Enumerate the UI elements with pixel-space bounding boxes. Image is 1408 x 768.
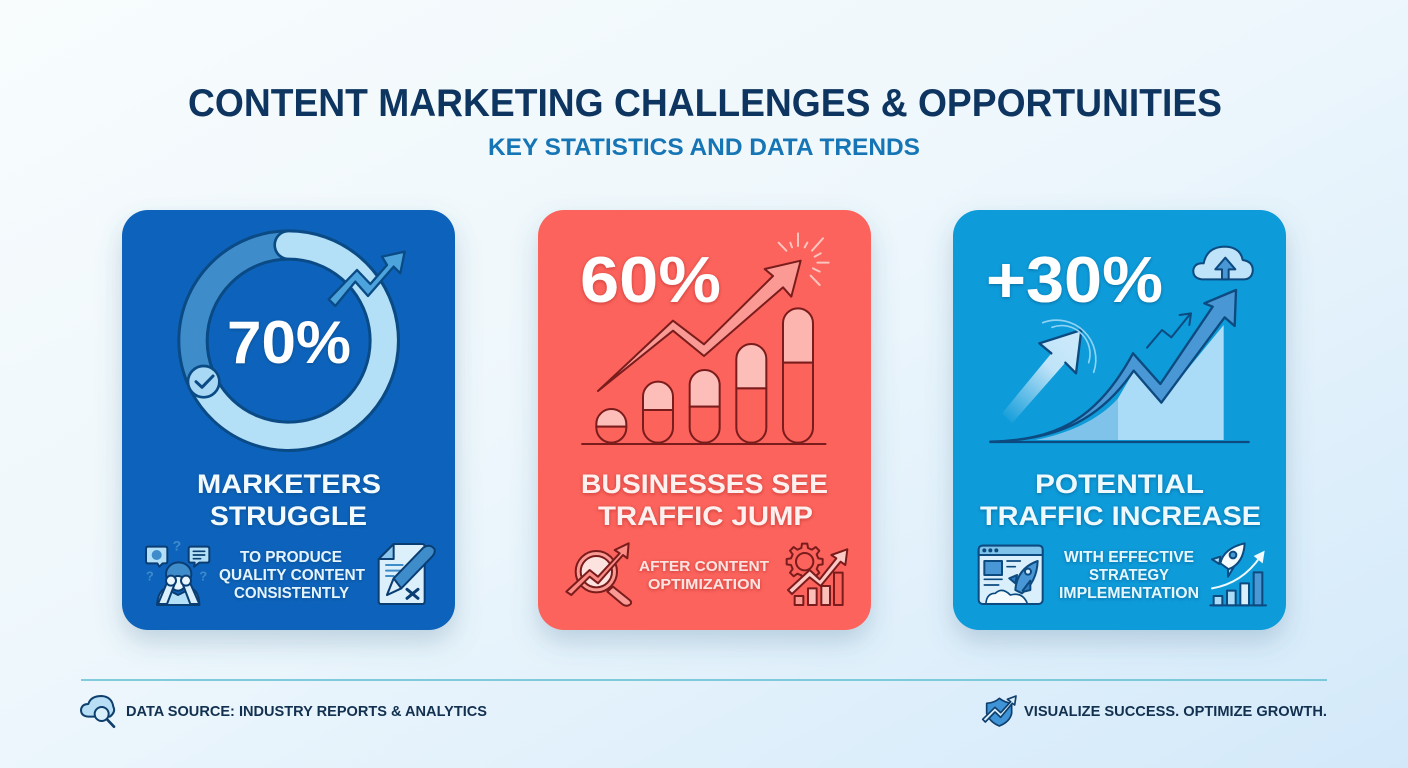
stat: 70%: 70%: [227, 309, 351, 376]
description: to produce quality content consistently: CONSISTENTLY: [234, 585, 349, 602]
heading: potential traffic increase: [980, 469, 1261, 531]
heading: marketers struggle: STRUGGLE: [210, 501, 367, 531]
bar chart with growth arrow: [581, 233, 829, 444]
description: with effective strategy implementation: [1059, 549, 1199, 602]
heading: marketers struggle: [197, 469, 381, 531]
icon: document and pen: [379, 544, 435, 604]
title: CONTENT MARKETING CHALLENGES & OPPORTUNITIES: [188, 82, 1222, 125]
description: with effective strategy implementation: WITH EFFECTIVE: [1064, 549, 1194, 566]
stat: 60%: 60%: [580, 243, 721, 316]
icon: cloud with magnifier: [81, 696, 114, 727]
description: with effective strategy implementation: STRATEGY: [1089, 567, 1169, 584]
icon: shield with arrow: [983, 696, 1016, 726]
icon: rocket and growth bars: [1210, 543, 1266, 605]
icon: browser window with rocket: [979, 546, 1043, 604]
description: to produce quality content consistently: TO PRODUCE: [240, 549, 342, 566]
subtitle: KEY STATISTICS AND DATA TRENDS: [488, 134, 920, 161]
panel: marketers struggle: [122, 210, 455, 630]
heading: potential traffic increase: TRAFFIC INCREASE: [980, 501, 1261, 531]
heading: potential traffic increase: POTENTIAL: [1035, 469, 1204, 499]
growth chart with arrows: [990, 290, 1249, 442]
icon: gear and growth bars: [787, 544, 847, 605]
footer: tagline: [983, 696, 1327, 726]
description: after content optimization: OPTIMIZATION: [648, 576, 761, 593]
icon: stressed marketer: [146, 538, 209, 605]
panel: potential traffic increase: [953, 210, 1286, 630]
footer: data source: [81, 696, 487, 727]
tagline text: VISUALIZE SUCCESS. OPTIMIZE GROWTH.: [1024, 703, 1327, 720]
icon: cloud upload: [1193, 247, 1253, 279]
stat: +30%: +30%: [986, 243, 1163, 316]
description: to produce quality content consistently: QUALITY CONTENT: [219, 567, 365, 584]
description: to produce quality content consistently: [219, 549, 365, 602]
heading: businesses see traffic jump: [581, 469, 828, 531]
donut chart: 70%: [188, 245, 405, 436]
heading: businesses see traffic jump: TRAFFIC JUMP: [598, 501, 813, 531]
description: after content optimization: AFTER CONTENT: [639, 558, 769, 575]
heading: marketers struggle: MARKETERS: [197, 469, 381, 499]
icon: stressed marketer: ?: [146, 570, 154, 584]
icon: stressed marketer: ?: [173, 538, 181, 554]
source text: DATA SOURCE: INDUSTRY REPORTS & ANALYTICS: [126, 703, 487, 720]
panel: businesses see traffic jump: [538, 210, 871, 630]
description: with effective strategy implementation: IMPLEMENTATION: [1059, 585, 1199, 602]
description: after content optimization: [639, 558, 769, 593]
icon: stressed marketer: ?: [199, 570, 207, 584]
heading: businesses see traffic jump: BUSINESSES SEE: [581, 469, 828, 499]
icon: magnifier with trend: [566, 543, 631, 606]
